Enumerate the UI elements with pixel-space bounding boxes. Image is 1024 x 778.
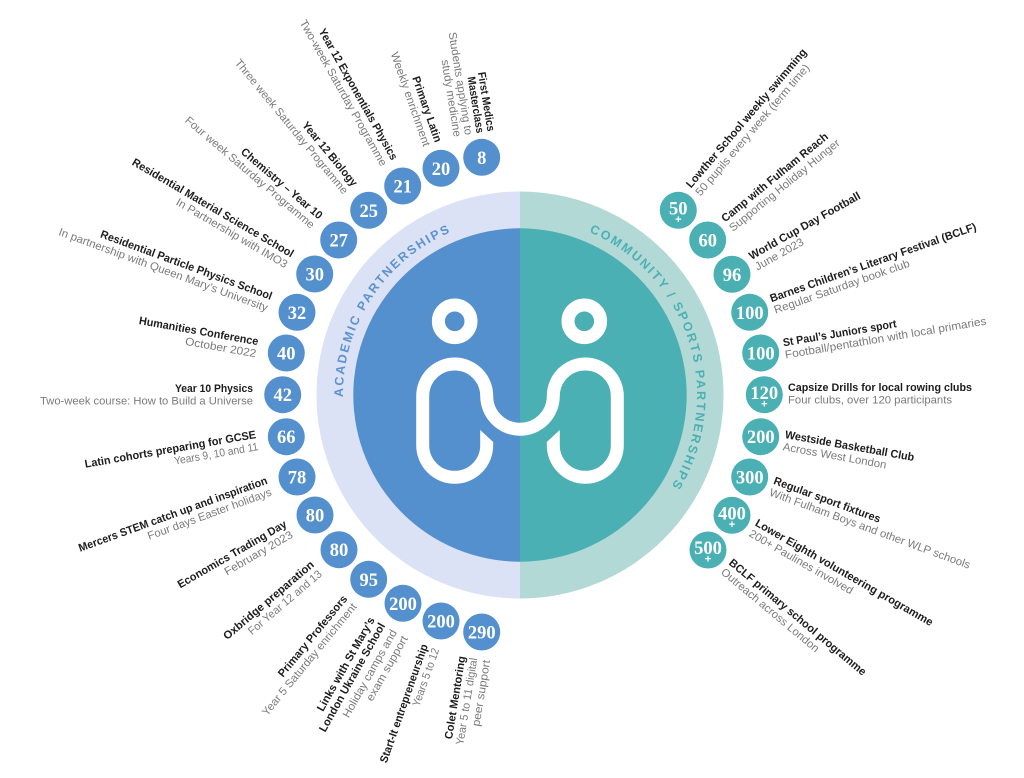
item: Lowther School weekly swimming: 50 [669,200,688,220]
item: Year 10 Physics: Year 10 Physics [175,383,253,395]
item: Regular sport fixtures [731,458,976,572]
item: Primary Professors: 95 [359,571,378,591]
item: Capsize Drills: Four clubs, over 120 participants [788,394,952,406]
item: Year 10 Physics: Two-week course: How to Build a Universe [40,395,253,407]
item: Lower Eighth volunteering programme: + [729,519,735,531]
icon: two linked figures logo [423,305,617,477]
item: Barnes Children's Literary Festival: 100 [736,304,764,324]
item: Westside Basketball Club: Westside Basketball Club [784,429,915,464]
item: Colet Mentoring: Year 5 to 11 digital [454,657,480,746]
item: Primary Professors [251,561,387,718]
item: Regular sport fixtures: With Fulham Boys and other WLP schools [768,487,972,572]
item: Regular sport fixtures: 300 [736,468,764,488]
item: Humanities Conference: Humanities Conference [138,315,259,348]
item: Oxbridge preparation: For Year 12 and 13 [246,568,325,638]
item: Barnes Children's Literary Festival: Barnes Children’s Literary Festival (BCLF) [768,221,978,305]
ring heading: academic partnerships: ACADEMIC PARTNERSHIPS [334,226,449,397]
item: Year 12 Biology: Year 12 Biology [299,120,360,190]
item: Chemistry Year 10: Four week Saturday Programme [182,115,316,231]
item: World Cup Day Football: June 2023 [753,236,806,273]
item: Year 12 Exponentials Physics: Two-week Saturday Programme [297,18,389,168]
panel: community and sports partnerships items [660,47,988,688]
item: St Paul's Juniors sport: Football/pentathlon with local primaries [784,316,988,361]
item: Residential Material Science School: 30 [305,266,324,286]
item: Lowther School weekly swimming: 50 pupils every week (term time) [694,62,813,199]
item: Economics Trading Day: February 2023 [223,529,295,578]
item: Colet Mentoring: 290 [468,624,496,644]
item: Residential Material Science School: Residential Material Science School [130,157,296,260]
item: Primary Professors: Year 5 Saturday enrichment [260,601,360,718]
item: Chemistry Year 10: 27 [329,232,348,252]
item: Residential Particle Physics School: Residential Particle Physics School [99,229,274,303]
item: Colet Mentoring: Colet Mentoring [443,655,468,740]
item: Camp with Fulham Reach: Supporting Holiday Hunger [727,137,843,234]
item: Barnes Children's Literary Festival [731,221,982,331]
item: Links with St Mary's London Ukraine School: Links with St Mary’s [315,615,378,714]
item: BCLF primary school programme [690,532,868,688]
item: Capsize Drills: Capsize Drills for local rowing clubs [788,382,972,394]
item: Lowther School weekly swimming [660,47,819,229]
item: Westside Basketball Club: Across West London [782,441,887,472]
item: Capsize Drills [746,376,972,413]
ring heading: community / sports partnerships: COMMUNITY / SPORTS PARTNERSHIPS [590,226,706,489]
item: Humanities Conference: 40 [277,344,296,364]
central circle diagram [316,192,724,598]
item: Year 12 Biology: Three week Saturday Programme [232,57,350,197]
item: Residential Particle Physics School [57,215,316,331]
item: Links with St Mary's London Ukraine School: exam support [364,633,411,703]
outer ring: community half [520,192,724,598]
item: Capsize Drills: + [761,398,768,410]
item: BCLF primary school programme: Outreach across London [718,566,821,655]
item: Residential Particle Physics School: 32 [288,304,306,324]
item: Primary Latin: 20 [432,160,450,180]
item: First Medics Masterclass: Students applying to [446,31,474,136]
item: Links with St Mary's London Ukraine School [307,585,422,747]
item: Primary Latin: Primary Latin [409,75,443,144]
item: First Medics Masterclass: Masterclass [465,76,486,134]
item: Start-It entrepreneurship [378,602,460,769]
inner disc: community half [520,228,687,562]
item: St Paul's Juniors sport: 100 [747,344,775,364]
item: Westside Basketball Club [742,418,915,476]
item: Economics Trading Day: 80 [306,506,324,526]
item: Year 10 Physics: 42 [273,386,292,406]
item: Latin cohorts preparing for GCSE: 66 [277,428,296,448]
item: Year 12 Exponentials Physics: Year 12 Exponentials Physics [316,27,399,162]
item: Year 12 Biology: 25 [359,202,378,222]
item: Lower Eighth volunteering programme: 400 [718,504,746,524]
item: World Cup Day Football: World Cup Day Football [747,190,863,263]
item: Start-It entrepreneurship: 200 [427,612,455,632]
item: Links with St Mary's London Ukraine School: 200 [389,595,417,615]
item: Oxbridge preparation: Oxbridge preparation [221,559,317,643]
item: Economics Trading Day [176,496,334,602]
item: Primary Professors: Primary Professors [276,593,350,680]
item: World Cup Day Football: 96 [723,266,741,286]
item: Capsize Drills: 120 [750,384,778,404]
item: BCLF primary school programme: 500 [694,539,722,559]
item: Chemistry Year 10: Chemistry – Year 10 [238,146,324,222]
item: Links with St Mary's London Ukraine School: Holiday camps and [341,628,400,720]
item: Primary Latin: Weekly enrichment [388,51,432,149]
item: Oxbridge preparation [221,531,358,652]
item: First Medics Masterclass [434,28,500,176]
item: Lower Eighth volunteering programme: 200+ Paulines involved [747,528,855,597]
item: Camp with Fulham Reach: 60 [698,232,717,252]
item: Economics Trading Day: Economics Trading Day [176,518,290,591]
item: Lowther School weekly swimming: + [675,214,682,226]
item: Start-It entrepreneurship: Start-It entrepreneurship [378,643,431,765]
item: Links with St Mary's London Ukraine School: London Ukraine School [317,621,388,734]
item: World Cup Day Football [714,190,869,293]
inner disc: academic half [353,228,520,562]
item: Residential Material Science School: In Partnership with IMO3 [174,196,289,271]
item: Mercers STEM catch up and inspiration: Mercers STEM catch up and inspiration [77,475,269,555]
item: Start-It entrepreneurship: Years 5 to 12 [411,647,442,708]
item: Colet Mentoring: peer support [471,658,493,727]
outer ring: academic half [316,192,520,598]
item: Latin cohorts preparing for GCSE: Years 9, 10 and 11 [173,441,259,468]
item: First Medics Masterclass: 8 [477,149,486,169]
panel: academic partnerships items [40,12,500,769]
item: BCLF primary school programme: + [705,554,711,566]
item: Year 12 Exponentials Physics [297,12,421,204]
item: Lower Eighth volunteering programme: Lower Eighth volunteering programme [753,517,935,629]
item: BCLF primary school programme: BCLF primary school programme [726,557,868,678]
item: St Paul's Juniors sport [742,303,988,372]
item: Latin cohorts preparing for GCSE [84,418,305,483]
item: Humanities Conference: October 2022 [184,336,257,360]
item: Camp with Fulham Reach: Camp with Fulham Reach [719,131,831,225]
item: Mercers STEM catch up and inspiration [77,458,316,566]
item: Humanities Conference [136,315,305,372]
item: Regular sport fixtures: Regular sport fixtures [772,475,882,526]
item: First Medics Masterclass: First Medics [475,71,496,132]
item: Year 12 Biology [232,49,387,229]
item: Mercers STEM catch up and inspiration: 78 [288,468,306,488]
item: Mercers STEM catch up and inspiration: Four days Easter holidays [146,486,274,543]
item: Lowther School weekly swimming: Lowther School weekly swimming [684,47,810,191]
item: Residential Material Science School [124,157,333,292]
item: Westside Basketball Club: 200 [747,428,775,448]
item: Year 10 Physics [40,376,301,413]
item: First Medics Masterclass: study medicine [439,59,463,138]
item: Camp with Fulham Reach [689,128,843,259]
item: Residential Particle Physics School: In partnership with Queen Mary’s University [57,226,270,314]
item: Oxbridge preparation: 80 [330,541,348,561]
item: St Paul's Juniors sport: St Paul’s Juniors sport [782,318,898,349]
item: Primary Latin [388,47,460,187]
item: Lower Eighth volunteering programme [714,497,935,640]
item: Year 12 Exponentials Physics: 21 [393,178,412,198]
item: Barnes Children's Literary Festival: Regular Saturday book club [773,258,911,317]
item: Latin cohorts preparing for GCSE: Latin cohorts preparing for GCSE [84,429,257,471]
item: Chemistry Year 10 [182,105,357,258]
item: Colet Mentoring [443,614,500,748]
